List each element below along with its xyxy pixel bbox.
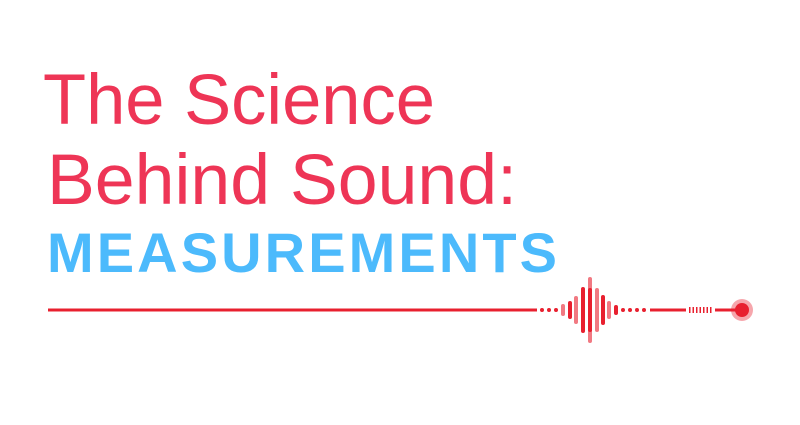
subtitle: measurements: MEASUREMENTS	[47, 221, 557, 284]
title line 1: The Science	[43, 61, 435, 140]
icon: end point circle	[731, 299, 753, 321]
title line 2: Behind Sound:	[47, 141, 517, 220]
waveform line	[48, 277, 740, 343]
